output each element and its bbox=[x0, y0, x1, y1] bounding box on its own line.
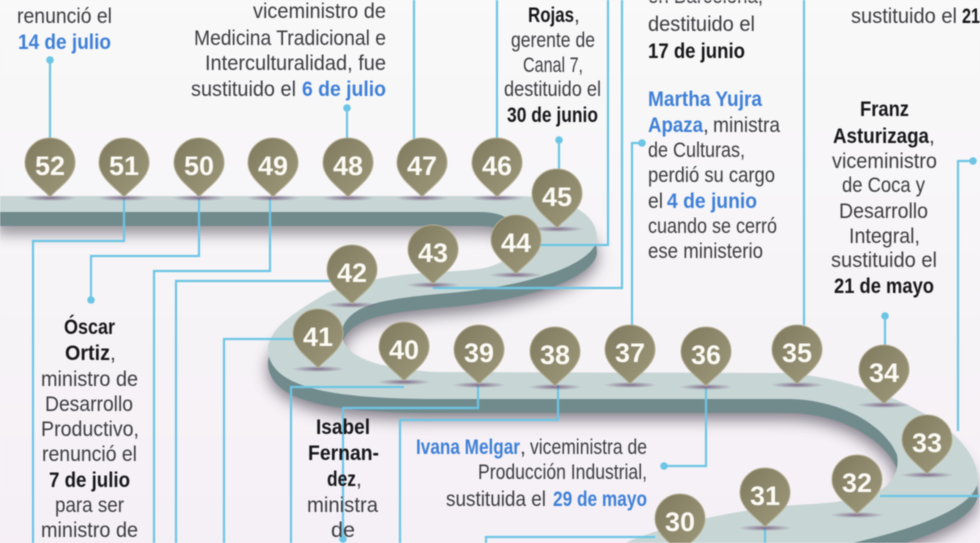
pin 31: 31 bbox=[750, 481, 780, 511]
text: pin 52 resignation: 14 de julio bbox=[18, 31, 111, 54]
pin 51: 51 bbox=[109, 151, 139, 181]
pin 36 bbox=[679, 327, 733, 390]
pin 47: 47 bbox=[407, 151, 437, 181]
pin 52: 52 bbox=[35, 151, 65, 181]
text: Isabel Fernández: de bbox=[331, 519, 355, 542]
pin 38: 38 bbox=[540, 340, 570, 370]
pin 34 bbox=[857, 345, 911, 408]
pin 42 bbox=[325, 245, 379, 308]
pin 50: 50 bbox=[184, 151, 214, 181]
pin 45 bbox=[530, 169, 584, 232]
text: Óscar Ortiz: , bbox=[110, 342, 116, 365]
pin 36: 36 bbox=[691, 340, 721, 370]
pin 41: 41 bbox=[303, 322, 333, 352]
text: pin 45 Rojas: Canal 7, bbox=[523, 54, 583, 77]
text: Ivana Melgar bbox=[416, 436, 647, 511]
text: Martha Yujra Apaza: , bbox=[703, 114, 709, 137]
pin 33: 33 bbox=[912, 428, 942, 458]
pin 39: 39 bbox=[464, 338, 494, 368]
text: Óscar Ortiz: renunció el bbox=[42, 443, 137, 466]
text: Franz Asturizaga: , bbox=[929, 125, 935, 148]
text: Isabel Fernández: Isabel bbox=[316, 416, 370, 439]
text: Isabel Fernández: Fernan- bbox=[308, 442, 379, 465]
text: Martha Yujra Apaza: ministra bbox=[713, 114, 780, 137]
pin 47 bbox=[395, 138, 449, 201]
pin 40 bbox=[377, 322, 431, 385]
text: pin 48 viceminister: Interculturalidad, fue bbox=[205, 52, 386, 75]
text: Martha Yujra Apaza: ese ministerio bbox=[648, 240, 763, 263]
text: Óscar Ortiz: 7 de julio bbox=[49, 469, 130, 492]
text: Martha Yujra Apaza: de Culturas, bbox=[648, 139, 745, 162]
text: Óscar Ortiz: para ser bbox=[55, 494, 124, 517]
text: pin 45 Rojas: destituido el bbox=[504, 78, 601, 101]
text: pin 48 viceminister bbox=[191, 0, 386, 101]
pin 30: 30 bbox=[665, 507, 695, 537]
text: pin 45 Rojas bbox=[504, 4, 601, 127]
pin 38 bbox=[528, 327, 582, 390]
text: Franz Asturizaga: sustituido el bbox=[831, 249, 937, 272]
pin 35: 35 bbox=[782, 338, 812, 368]
pin 37 bbox=[603, 325, 657, 388]
pin 31 bbox=[738, 468, 792, 531]
text: Martha Yujra Apaza bbox=[648, 88, 780, 263]
pin 46: 46 bbox=[482, 151, 512, 181]
text: Martha Yujra Apaza: Apaza bbox=[648, 114, 703, 137]
text: pin 45 Rojas: 30 de junio bbox=[507, 104, 598, 127]
text: Óscar Ortiz: Ortiz bbox=[65, 342, 110, 365]
text: Barcelona dismissal: destituido el bbox=[648, 13, 755, 36]
text: Isabel Fernández bbox=[307, 416, 379, 542]
pin 43: 43 bbox=[418, 238, 448, 268]
text: pin 45 Rojas: gerente de bbox=[511, 29, 595, 52]
text: Martha Yujra Apaza: 4 de junio bbox=[667, 190, 757, 213]
text: Martha Yujra Apaza: Martha Yujra bbox=[648, 88, 762, 111]
text: Franz Asturizaga bbox=[831, 98, 937, 298]
pin 45: 45 bbox=[542, 182, 572, 212]
pin 43 bbox=[406, 225, 460, 288]
pin 32: 32 bbox=[842, 468, 872, 498]
text: Óscar Ortiz bbox=[41, 315, 139, 542]
text: pin 48 viceminister: Medicina Tradicional e bbox=[194, 27, 386, 50]
text: Franz Asturizaga: Desarrollo bbox=[839, 200, 928, 223]
text: Ivana Melgar: sustituida el bbox=[446, 488, 546, 511]
text: Martha Yujra Apaza: perdió su cargo bbox=[648, 164, 775, 187]
text: Isabel Fernández: ministra bbox=[307, 494, 378, 517]
text: Franz Asturizaga: de Coca y bbox=[842, 174, 925, 197]
pin 40: 40 bbox=[389, 335, 419, 365]
pin 41 bbox=[291, 309, 345, 372]
text: pin 45 Rojas: Rojas bbox=[528, 4, 574, 27]
pin 37: 37 bbox=[615, 338, 645, 368]
pin 50 bbox=[172, 138, 226, 201]
text: Óscar Ortiz: ministro de bbox=[41, 519, 138, 542]
text: Martha Yujra Apaza: cuando se cerró bbox=[648, 215, 777, 238]
text: pin 48 viceminister: sustituido el bbox=[191, 78, 296, 101]
text: Ivana Melgar: Producción Industrial, bbox=[478, 461, 647, 484]
text: Isabel Fernández: dez bbox=[327, 468, 356, 491]
winding road bbox=[0, 196, 978, 543]
pin 30 bbox=[653, 494, 707, 543]
text: Barcelona dismissal: 17 de junio bbox=[648, 40, 745, 63]
pin 51 bbox=[97, 138, 151, 201]
text: Barcelona dismissal bbox=[648, 0, 763, 63]
pin 49 bbox=[246, 138, 300, 201]
pin 42: 42 bbox=[337, 258, 367, 288]
text: Franz Asturizaga: viceministro bbox=[832, 150, 937, 173]
text: Óscar Ortiz: ministro de bbox=[41, 368, 138, 391]
text: Ivana Melgar: 29 de mayo bbox=[553, 488, 647, 511]
text: Óscar Ortiz: Óscar bbox=[64, 315, 115, 339]
text: Franz Asturizaga: Asturizaga bbox=[833, 125, 929, 148]
text: pin 48 viceminister: 6 de julio bbox=[302, 78, 386, 101]
text: Ivana Melgar: viceministra de bbox=[530, 436, 647, 459]
text: Ivana Melgar: , bbox=[520, 436, 526, 459]
text: top right replacement: sustituido el bbox=[851, 5, 957, 28]
pin 35 bbox=[770, 325, 824, 388]
text: Isabel Fernández: , bbox=[356, 468, 362, 491]
text: Martha Yujra Apaza: el bbox=[648, 190, 663, 213]
text: Franz Asturizaga: Integral, bbox=[849, 225, 920, 248]
pin 48 bbox=[321, 138, 375, 201]
text: pin 52 resignation: renunció el bbox=[17, 5, 112, 28]
text: Óscar Ortiz: Desarrollo bbox=[45, 393, 133, 416]
pin 52 bbox=[23, 138, 77, 201]
text: Franz Asturizaga: 21 de mayo bbox=[834, 275, 934, 298]
text: Ivana Melgar: Ivana Melgar bbox=[416, 436, 520, 459]
text: pin 48 viceminister: viceministro de bbox=[253, 0, 386, 23]
pin 44: 44 bbox=[501, 228, 531, 258]
pin 46 bbox=[470, 138, 524, 201]
pin 44 bbox=[489, 215, 543, 278]
pin 34: 34 bbox=[869, 358, 899, 388]
text: pin 45 Rojas: , bbox=[574, 4, 580, 27]
pin 33 bbox=[900, 415, 954, 478]
pin 48: 48 bbox=[333, 151, 363, 181]
pin 49: 49 bbox=[258, 151, 288, 181]
text: pin 52 resignation bbox=[17, 5, 112, 54]
text: Óscar Ortiz: Productivo, bbox=[41, 418, 139, 441]
pin 39 bbox=[452, 325, 506, 388]
pin 32 bbox=[830, 455, 884, 518]
text: Franz Asturizaga: Franz bbox=[860, 98, 909, 121]
